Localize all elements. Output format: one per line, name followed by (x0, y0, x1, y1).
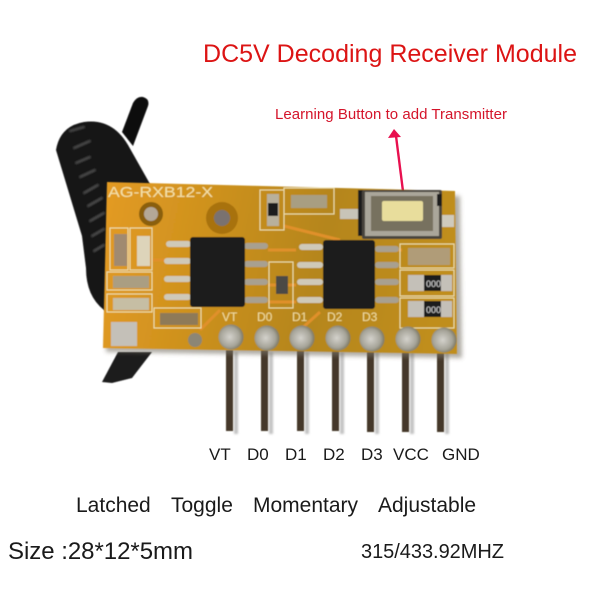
output modes (76, 494, 476, 517)
output modes: Momentary (253, 494, 359, 517)
board pin silkscreen labels: D0 (257, 310, 273, 324)
pin labels: VCC (393, 445, 429, 464)
pin labels (209, 445, 480, 464)
board pin silkscreen labels: D2 (327, 310, 343, 324)
icon: learning button (340, 190, 454, 239)
board pin silkscreen labels: D1 (292, 310, 308, 324)
pin labels: VT (209, 445, 231, 464)
pin headers (226, 350, 449, 434)
callout: learning button label: Learning Button to add Transmitter (275, 106, 507, 123)
pin labels: D1 (285, 445, 307, 464)
size specification: Size :28*12*5mm (8, 538, 193, 565)
small capacitor between chips (269, 262, 293, 308)
pin labels: D0 (247, 445, 269, 464)
components right (400, 244, 454, 328)
output modes: Latched (76, 494, 151, 517)
board pin silkscreen labels: D3 (362, 310, 378, 324)
icon: spring antenna (56, 97, 152, 383)
output modes: Adjustable (378, 494, 476, 517)
output modes: Toggle (171, 494, 233, 517)
copper traces (152, 226, 402, 330)
solder pads (188, 324, 456, 352)
frequency specification: 315/433.92MHZ (361, 541, 504, 563)
chip right (297, 240, 399, 309)
board pin silkscreen labels (222, 310, 378, 324)
solder holes (139, 202, 238, 234)
board pin silkscreen labels: VT (222, 310, 238, 324)
pin labels: GND (442, 445, 480, 464)
chip left (164, 237, 268, 307)
panel: circuit board (103, 182, 462, 358)
title: DC5V Decoding Receiver Module (203, 40, 577, 68)
components right: 000 (426, 305, 441, 315)
board silkscreen label: AG-RXB12-X (108, 185, 213, 201)
components right: 000 (426, 279, 441, 289)
pin labels: D3 (361, 445, 383, 464)
arrow: points from the button to the label (388, 129, 405, 207)
led and resistor (260, 188, 334, 230)
capacitors left (107, 228, 201, 346)
pin labels: D2 (323, 445, 345, 464)
